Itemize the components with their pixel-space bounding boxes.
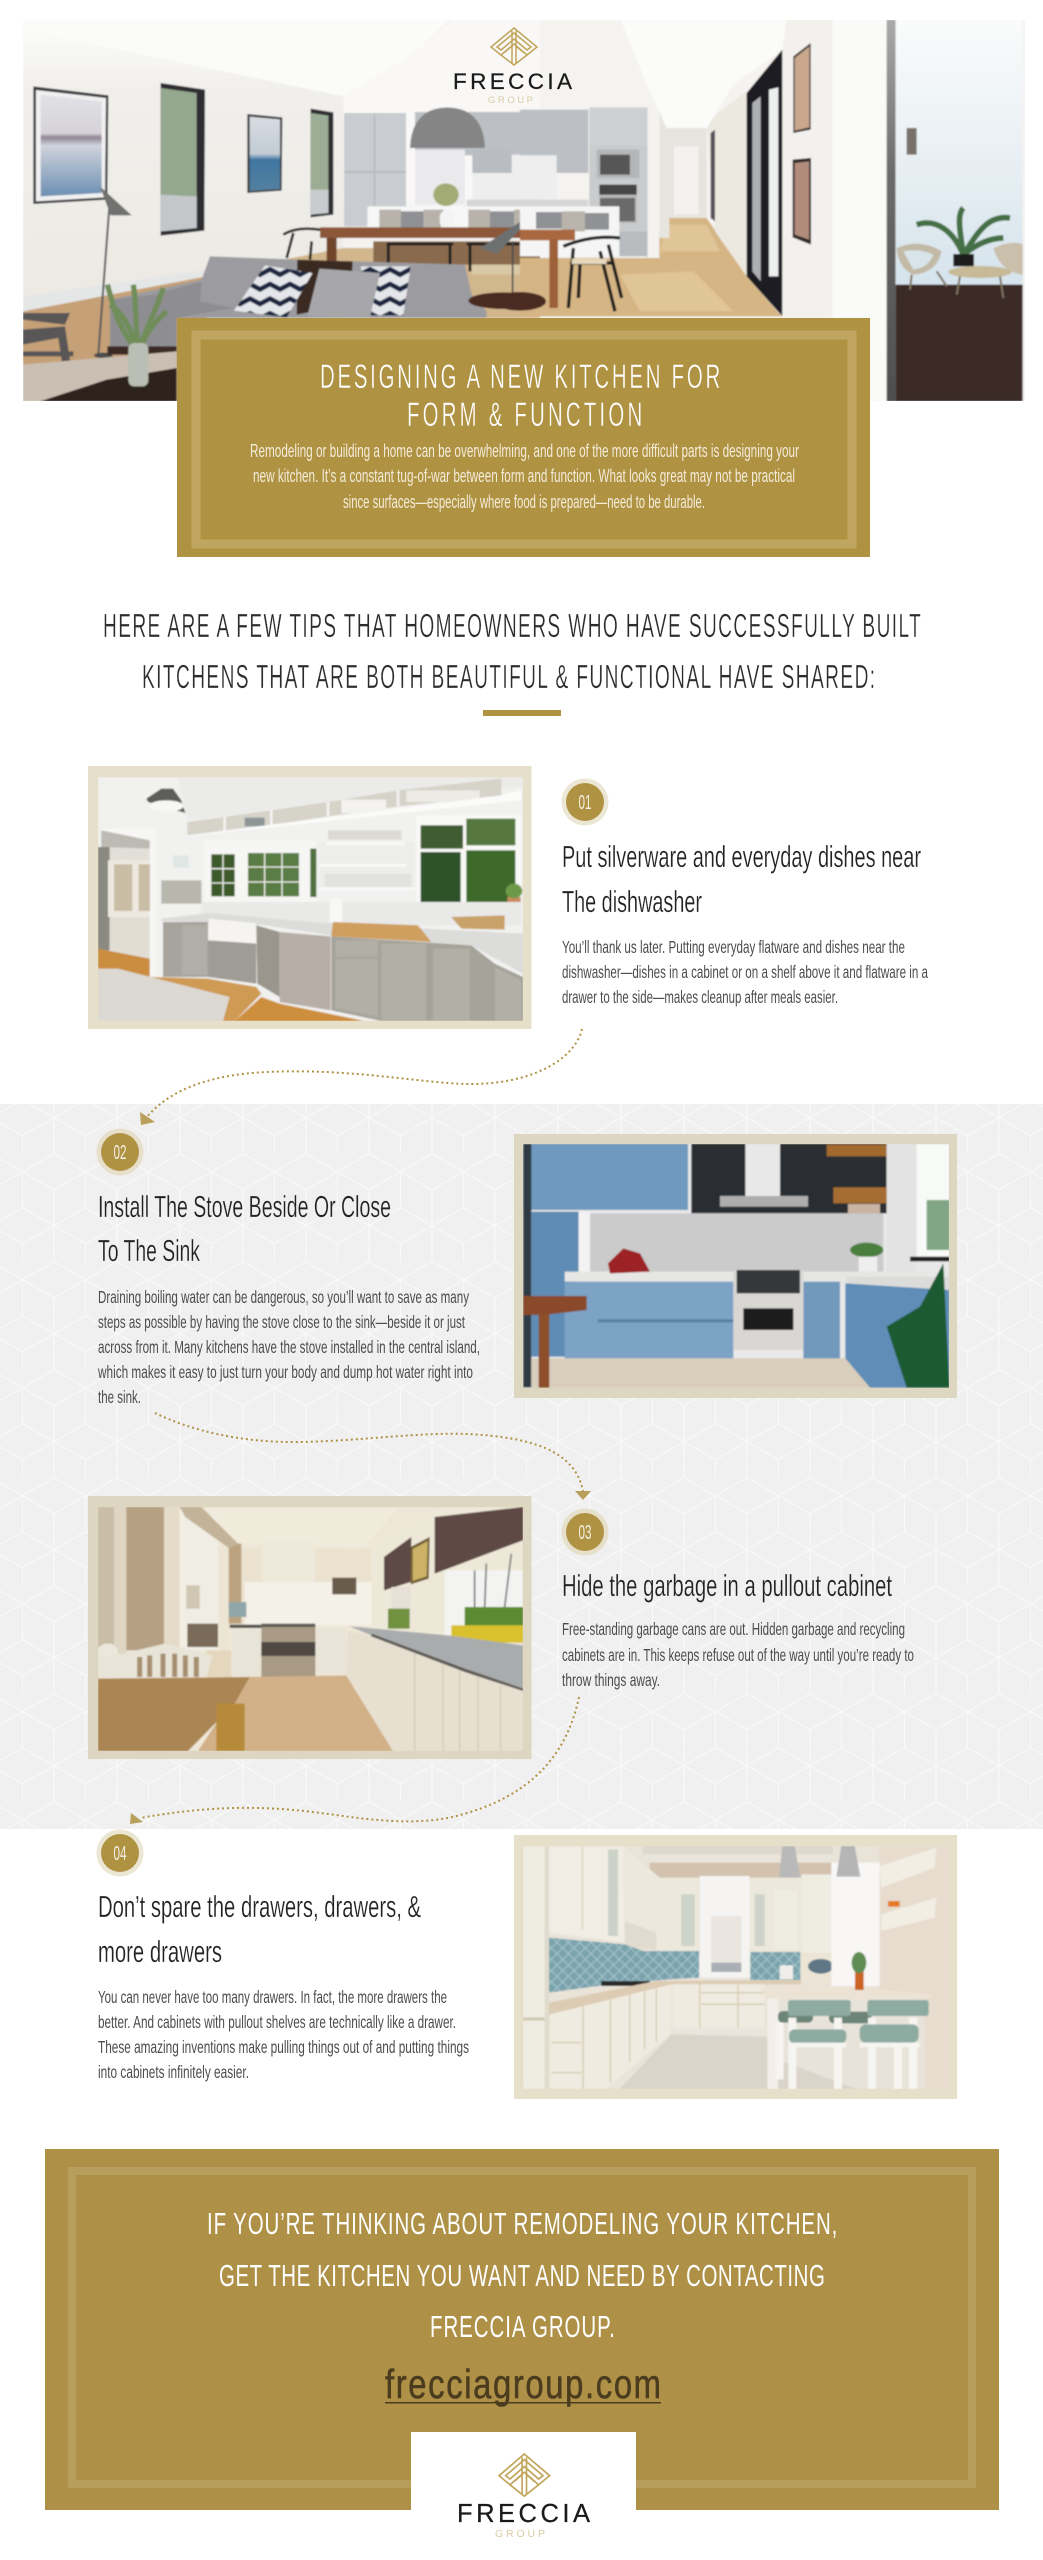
hero photo: open-plan kitchen and living room: [23, 18, 1025, 401]
tip 4 title: Don’t spare the drawers, drawers, &: [98, 1889, 421, 1924]
icon: gold arrow diamond: [499, 2454, 550, 2496]
photo 1: white and grey kitchen: [88, 766, 532, 1029]
tip 4 title: [98, 1889, 421, 1969]
badge 01: 01: [578, 792, 592, 814]
intro paragraph: [250, 441, 799, 512]
heading: tips introduction: HERE ARE A FEW TIPS THAT HOMEOWNERS WHO HAVE SUCCESSFULLY BUILT: [103, 608, 921, 644]
tip 2 title: [98, 1189, 391, 1268]
logo: Freccia Group header: [453, 28, 572, 106]
sub wordmark: GROUP: [488, 95, 533, 106]
badge 04: 04: [114, 1843, 126, 1865]
heading: tips introduction: [103, 608, 921, 716]
main title: FORM & FUNCTION: [407, 396, 642, 433]
tip 2 title: Install The Stove Beside Or Close: [98, 1189, 391, 1224]
tip 1 title: [562, 839, 921, 919]
tip 2 text: Draining boiling water can be dangerous, so you’ll want to save as many: [98, 1287, 469, 1307]
call to action text: [207, 2206, 837, 2344]
heading: tips introduction: KITCHENS THAT ARE BOTH BEAUTIFUL & FUNCTIONAL HAVE SHARED:: [142, 659, 875, 695]
tip 4 text: better. And cabinets with pullout shelves are technically like a drawer.: [98, 2012, 456, 2032]
photo 2: blue kitchen: [514, 1134, 957, 1398]
badge 01: [562, 778, 608, 826]
badge 02: 02: [114, 1142, 126, 1164]
sub wordmark: GROUP: [495, 2528, 545, 2540]
tip 4 text: You can never have too many drawers. In fact, the more drawers the: [98, 1987, 447, 2007]
main title: DESIGNING A NEW KITCHEN FOR: [320, 358, 720, 395]
badge 02: [96, 1128, 144, 1176]
arrow: tip 3 to tip 4: [130, 1697, 579, 1824]
badge 03: 03: [578, 1522, 592, 1544]
photo 3: beige kitchen with wooden table: [88, 1496, 532, 1759]
tip 2 text: which makes it easy to just turn your body and dump hot water right into: [97, 1362, 473, 1382]
tip 2 text: the sink.: [98, 1387, 141, 1407]
tip 3 text: throw things away.: [562, 1670, 660, 1690]
icon: gold arrow diamond: [491, 28, 537, 65]
tip 1 title: The dishwasher: [562, 884, 702, 919]
website link: frecciagroup.com: [385, 2360, 661, 2407]
wordmark: FRECCIA: [453, 69, 572, 94]
intro paragraph: since surfaces—especially where food is prepared—need to be durable.: [343, 492, 705, 512]
panel: call to action: [45, 2149, 999, 2510]
tip 3 text: [562, 1619, 914, 1690]
tip 2 title: To The Sink: [98, 1233, 200, 1268]
call to action text: FRECCIA GROUP.: [430, 2309, 615, 2344]
tip 1 text: [562, 937, 928, 1007]
badge 03: [562, 1508, 608, 1556]
call to action text: GET THE KITCHEN YOU WANT AND NEED BY CONTACTING: [219, 2258, 825, 2293]
badge 04: [96, 1830, 144, 1876]
photo 4: cream kitchen with teal backsplash: [514, 1835, 957, 2099]
panel: intro gold box: [177, 318, 870, 557]
tip 4 text: These amazing inventions make pulling things out of and putting things: [98, 2037, 469, 2057]
tip 4 text: [98, 1987, 469, 2082]
section background: hexagon pattern band: [0, 1104, 1043, 1829]
main title: [320, 358, 720, 433]
call to action text: IF YOU’RE THINKING ABOUT REMODELING YOUR KITCHEN,: [207, 2206, 837, 2241]
tip 2 text: across from it. Many kitchens have the stove installed in the central island,: [98, 1337, 480, 1357]
tip 4 text: into cabinets infinitely easier.: [98, 2062, 249, 2082]
tip 1 text: drawer to the side—makes cleanup after meals easier.: [562, 987, 838, 1007]
tip 4 title: more drawers: [98, 1934, 222, 1969]
arrow: tip 2 to tip 3: [155, 1413, 591, 1500]
arrow: tip 1 to tip 2: [140, 1029, 582, 1125]
tip 2 text: [97, 1287, 480, 1407]
wordmark: FRECCIA: [457, 2500, 590, 2528]
logo: Freccia Group footer: [411, 2432, 636, 2560]
tip 2 text: steps as possible by having the stove close to the sink—beside it or just: [98, 1312, 465, 1332]
